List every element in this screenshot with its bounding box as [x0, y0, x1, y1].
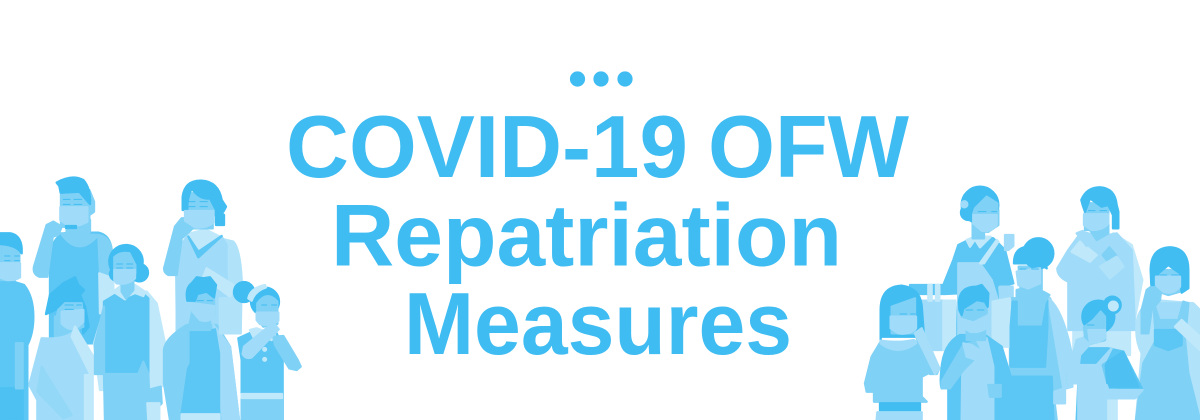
person: man in open coat	[164, 277, 239, 420]
title: COVID-19	[286, 97, 688, 196]
three dots ornament	[570, 71, 633, 87]
person: man in overalls and hoodie	[993, 238, 1072, 420]
person: tall man	[34, 178, 112, 343]
person: far left man	[0, 233, 33, 420]
title: Repatriation	[331, 186, 842, 284]
person: woman in pinafore dress	[1136, 247, 1200, 420]
person: boy in jacket	[941, 285, 1013, 420]
person: boy in light t-shirt	[29, 277, 101, 420]
illustration: left group of masked people	[0, 178, 301, 420]
person: woman in V-neck sweater	[164, 181, 242, 333]
person: woman in vest	[94, 245, 166, 420]
person: woman in apron with bag	[910, 187, 1013, 350]
person: girl with ponytail in apron	[1067, 297, 1143, 420]
person: child with arms crossed	[234, 282, 301, 420]
person: woman with long hair	[865, 286, 939, 420]
illustration: right group of masked people	[865, 187, 1200, 420]
title	[286, 97, 909, 373]
title: OFW	[708, 97, 909, 196]
title: Measures	[404, 274, 792, 373]
person: tall woman in sweater	[1057, 187, 1142, 355]
